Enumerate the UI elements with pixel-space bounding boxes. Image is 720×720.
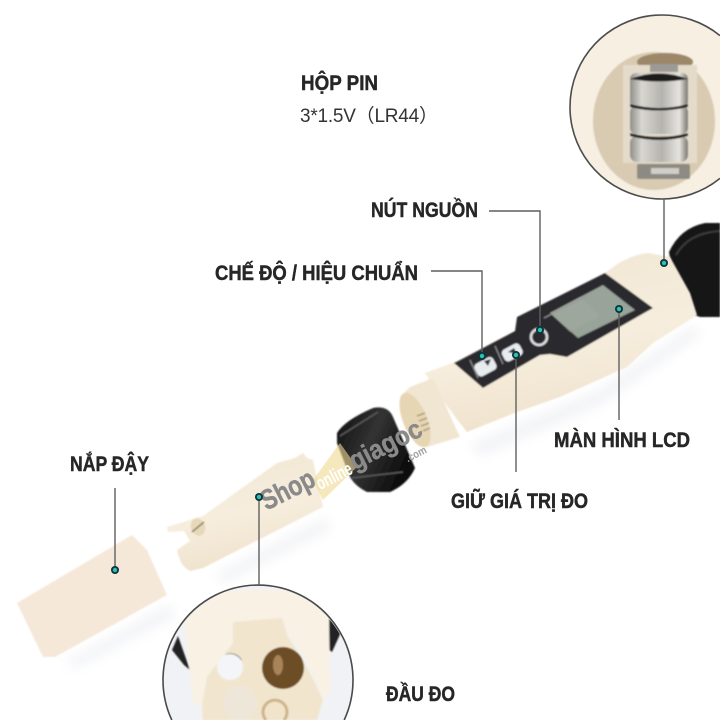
leader: hold button — [512, 351, 520, 472]
meter body — [393, 253, 697, 451]
watermark — [255, 409, 433, 532]
cap ring on meter — [669, 223, 720, 317]
label: power button: NÚT NGUỒN — [371, 198, 478, 222]
battery detail circle — [570, 15, 720, 199]
black coupling ring — [337, 407, 415, 492]
leader: probe — [255, 493, 263, 585]
label: cover cap: NẮP ĐẬY — [70, 452, 149, 476]
battery holder — [623, 65, 697, 163]
leader: mode button — [431, 271, 486, 360]
label: battery compartment: HỘP PIN — [301, 71, 378, 95]
battery clip — [637, 164, 690, 179]
control panel — [454, 273, 653, 388]
soft shadows — [65, 325, 700, 668]
label: probe: ĐẦU ĐO — [386, 683, 455, 706]
battery cavity — [593, 52, 715, 190]
watermark: .com — [404, 444, 429, 465]
leader: battery — [660, 199, 668, 267]
label: mode calibration: CHẾ ĐỘ / HIỆU CHUẨN — [215, 261, 418, 285]
power button — [531, 329, 547, 345]
threaded open end — [400, 378, 460, 447]
watermark: giagoc — [344, 414, 427, 476]
lcd screen — [550, 285, 635, 338]
mode button — [473, 356, 498, 378]
leader: lcd screen — [615, 305, 623, 420]
leader: cap — [111, 488, 119, 574]
batteries — [630, 73, 688, 162]
probe tip detail circle — [163, 585, 353, 720]
watermark: online — [313, 459, 356, 495]
label: hold value: GIỮ GIÁ TRỊ ĐO — [451, 489, 588, 513]
hold button — [500, 342, 524, 363]
sealing cap — [17, 535, 167, 657]
label: lcd screen: MÀN HÌNH LCD — [554, 429, 690, 452]
watermark: Shop — [255, 463, 320, 516]
label: battery spec: 3*1.5V（LR44） — [300, 105, 438, 127]
leader: power button — [489, 211, 544, 334]
probe — [167, 453, 323, 571]
